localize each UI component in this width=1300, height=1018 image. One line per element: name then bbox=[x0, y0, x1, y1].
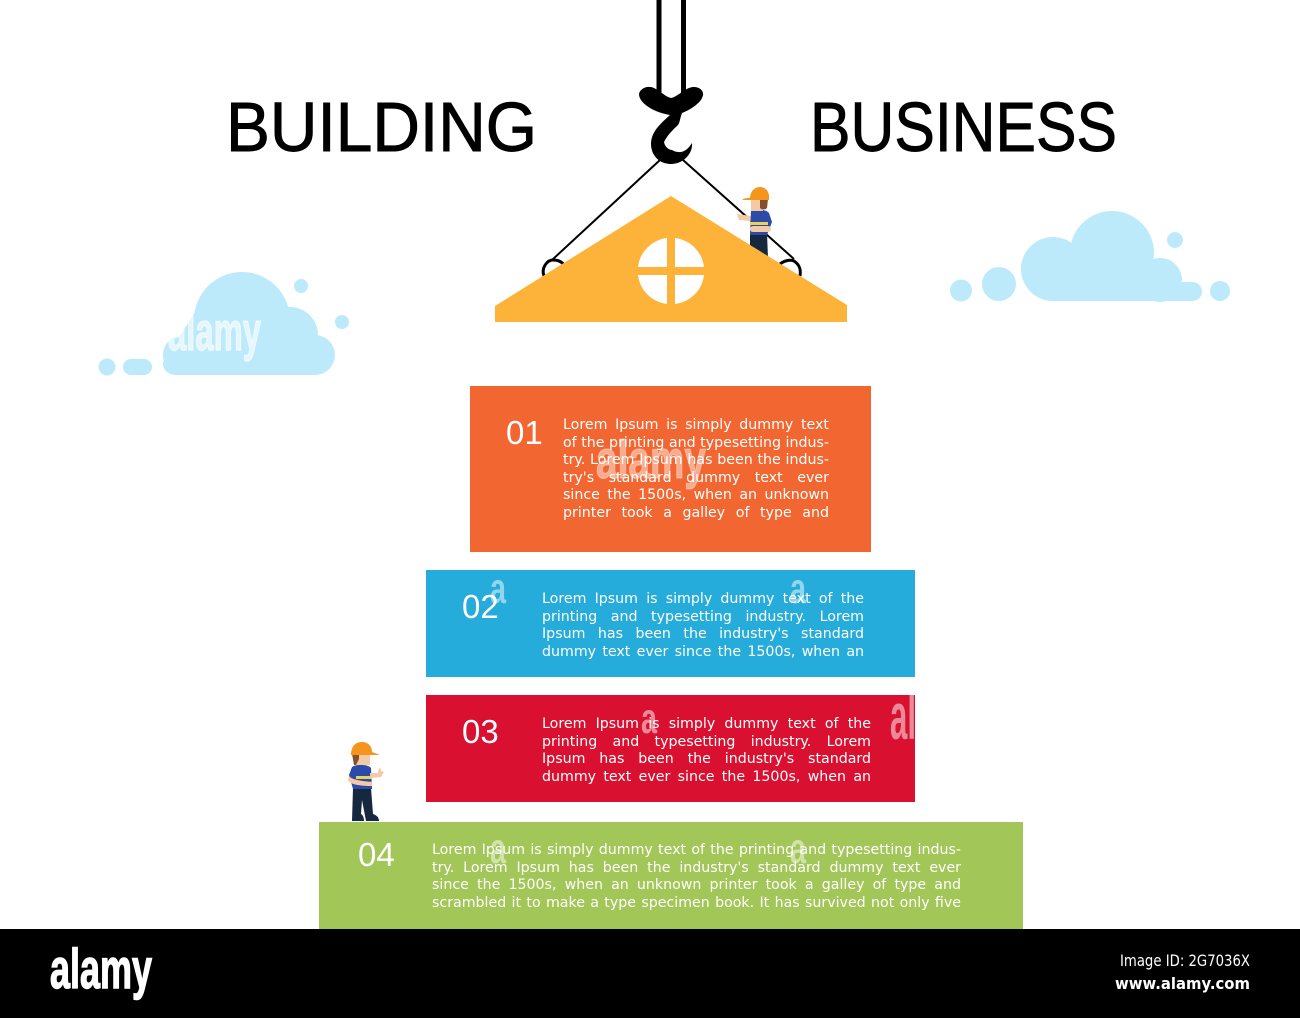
icon: round roof window bbox=[638, 238, 704, 304]
step number 04: 04 bbox=[358, 836, 395, 873]
panel: step 02 bbox=[426, 570, 915, 677]
step text 03 bbox=[542, 716, 871, 784]
panel: step 04 bbox=[319, 822, 1023, 929]
watermark: alamy on step 01: alamy bbox=[596, 430, 706, 490]
panel: step 01 bbox=[470, 386, 871, 552]
watermark fragments: a bbox=[490, 565, 507, 613]
icon: crane cables bbox=[656, 0, 686, 95]
step number 03: 03 bbox=[462, 713, 499, 750]
footer logo: alamy: alamy bbox=[50, 937, 152, 1000]
step text 01: of the printing and typesetting indus- bbox=[563, 434, 829, 450]
icon: worker on ground bbox=[348, 742, 384, 821]
footer url: www.alamy.com bbox=[1115, 974, 1250, 993]
icon: cloud right bbox=[950, 211, 1230, 302]
icon: crane hook bbox=[639, 87, 703, 164]
step text 01: try. Lorem Ipsum has been the indus- bbox=[563, 452, 829, 468]
step text 03: dummy text ever since the 1500s, when an bbox=[542, 768, 871, 784]
step text 04: Lorem Ipsum is simply dummy text of the printing and typesetting indus- bbox=[432, 842, 961, 858]
step text 01: printer took a galley of type and bbox=[563, 504, 829, 520]
watermark: alamy on cloud: alamy bbox=[168, 302, 261, 362]
watermark fragments: a bbox=[790, 565, 807, 613]
panel: step 03 bbox=[426, 695, 915, 802]
watermark fragments: a bbox=[490, 825, 507, 873]
step text 02 bbox=[542, 591, 864, 660]
step text 04: since the 1500s, when an unknown printer took a galley of type and bbox=[432, 877, 961, 893]
watermark fragments: a bbox=[790, 825, 807, 873]
step text 03: Ipsum has been the industry's standard bbox=[542, 751, 871, 767]
step text 01: since the 1500s, when an unknown bbox=[563, 487, 829, 503]
footer image id: Image ID: 2G7036X bbox=[1120, 951, 1250, 970]
step text 02: Lorem Ipsum is simply dummy text of the bbox=[542, 591, 864, 607]
title word: BUILDING: BUILDING bbox=[226, 88, 537, 166]
icon: roof bbox=[495, 196, 847, 322]
step text 02: dummy text ever since the 1500s, when an bbox=[542, 644, 864, 660]
icon: lifting slings bbox=[543, 160, 800, 276]
watermark fragments: a bbox=[641, 695, 658, 743]
step text 04 bbox=[432, 842, 961, 910]
title word: BUSINESS: BUSINESS bbox=[810, 88, 1117, 166]
step text 01 bbox=[563, 417, 829, 520]
icon: cloud left bbox=[98, 272, 349, 376]
main illustration layer: al bbox=[890, 679, 916, 753]
step text 02: printing and typesetting industry. Lorem bbox=[542, 608, 864, 624]
step text 04: try. Lorem Ipsum has been the industry's standard dummy text ever bbox=[432, 860, 961, 876]
step text 03: printing and typesetting industry. Lorem bbox=[542, 734, 871, 750]
step text 03: Lorem Ipsum is simply dummy text of the bbox=[542, 716, 871, 732]
footer bar bbox=[0, 929, 1300, 1018]
step number 02: 02 bbox=[462, 588, 499, 625]
step number 01: 01 bbox=[506, 414, 543, 451]
step text 01: Lorem Ipsum is simply dummy text bbox=[563, 417, 829, 433]
step text 02: Ipsum has been the industry's standard bbox=[542, 626, 864, 642]
watermark fragments bbox=[490, 565, 916, 873]
icon: worker on roof bbox=[737, 187, 772, 258]
step text 04: scrambled it to make a type specimen book. It has survived not only five bbox=[432, 894, 961, 910]
step text 01: try's standard dummy text ever bbox=[563, 470, 829, 486]
